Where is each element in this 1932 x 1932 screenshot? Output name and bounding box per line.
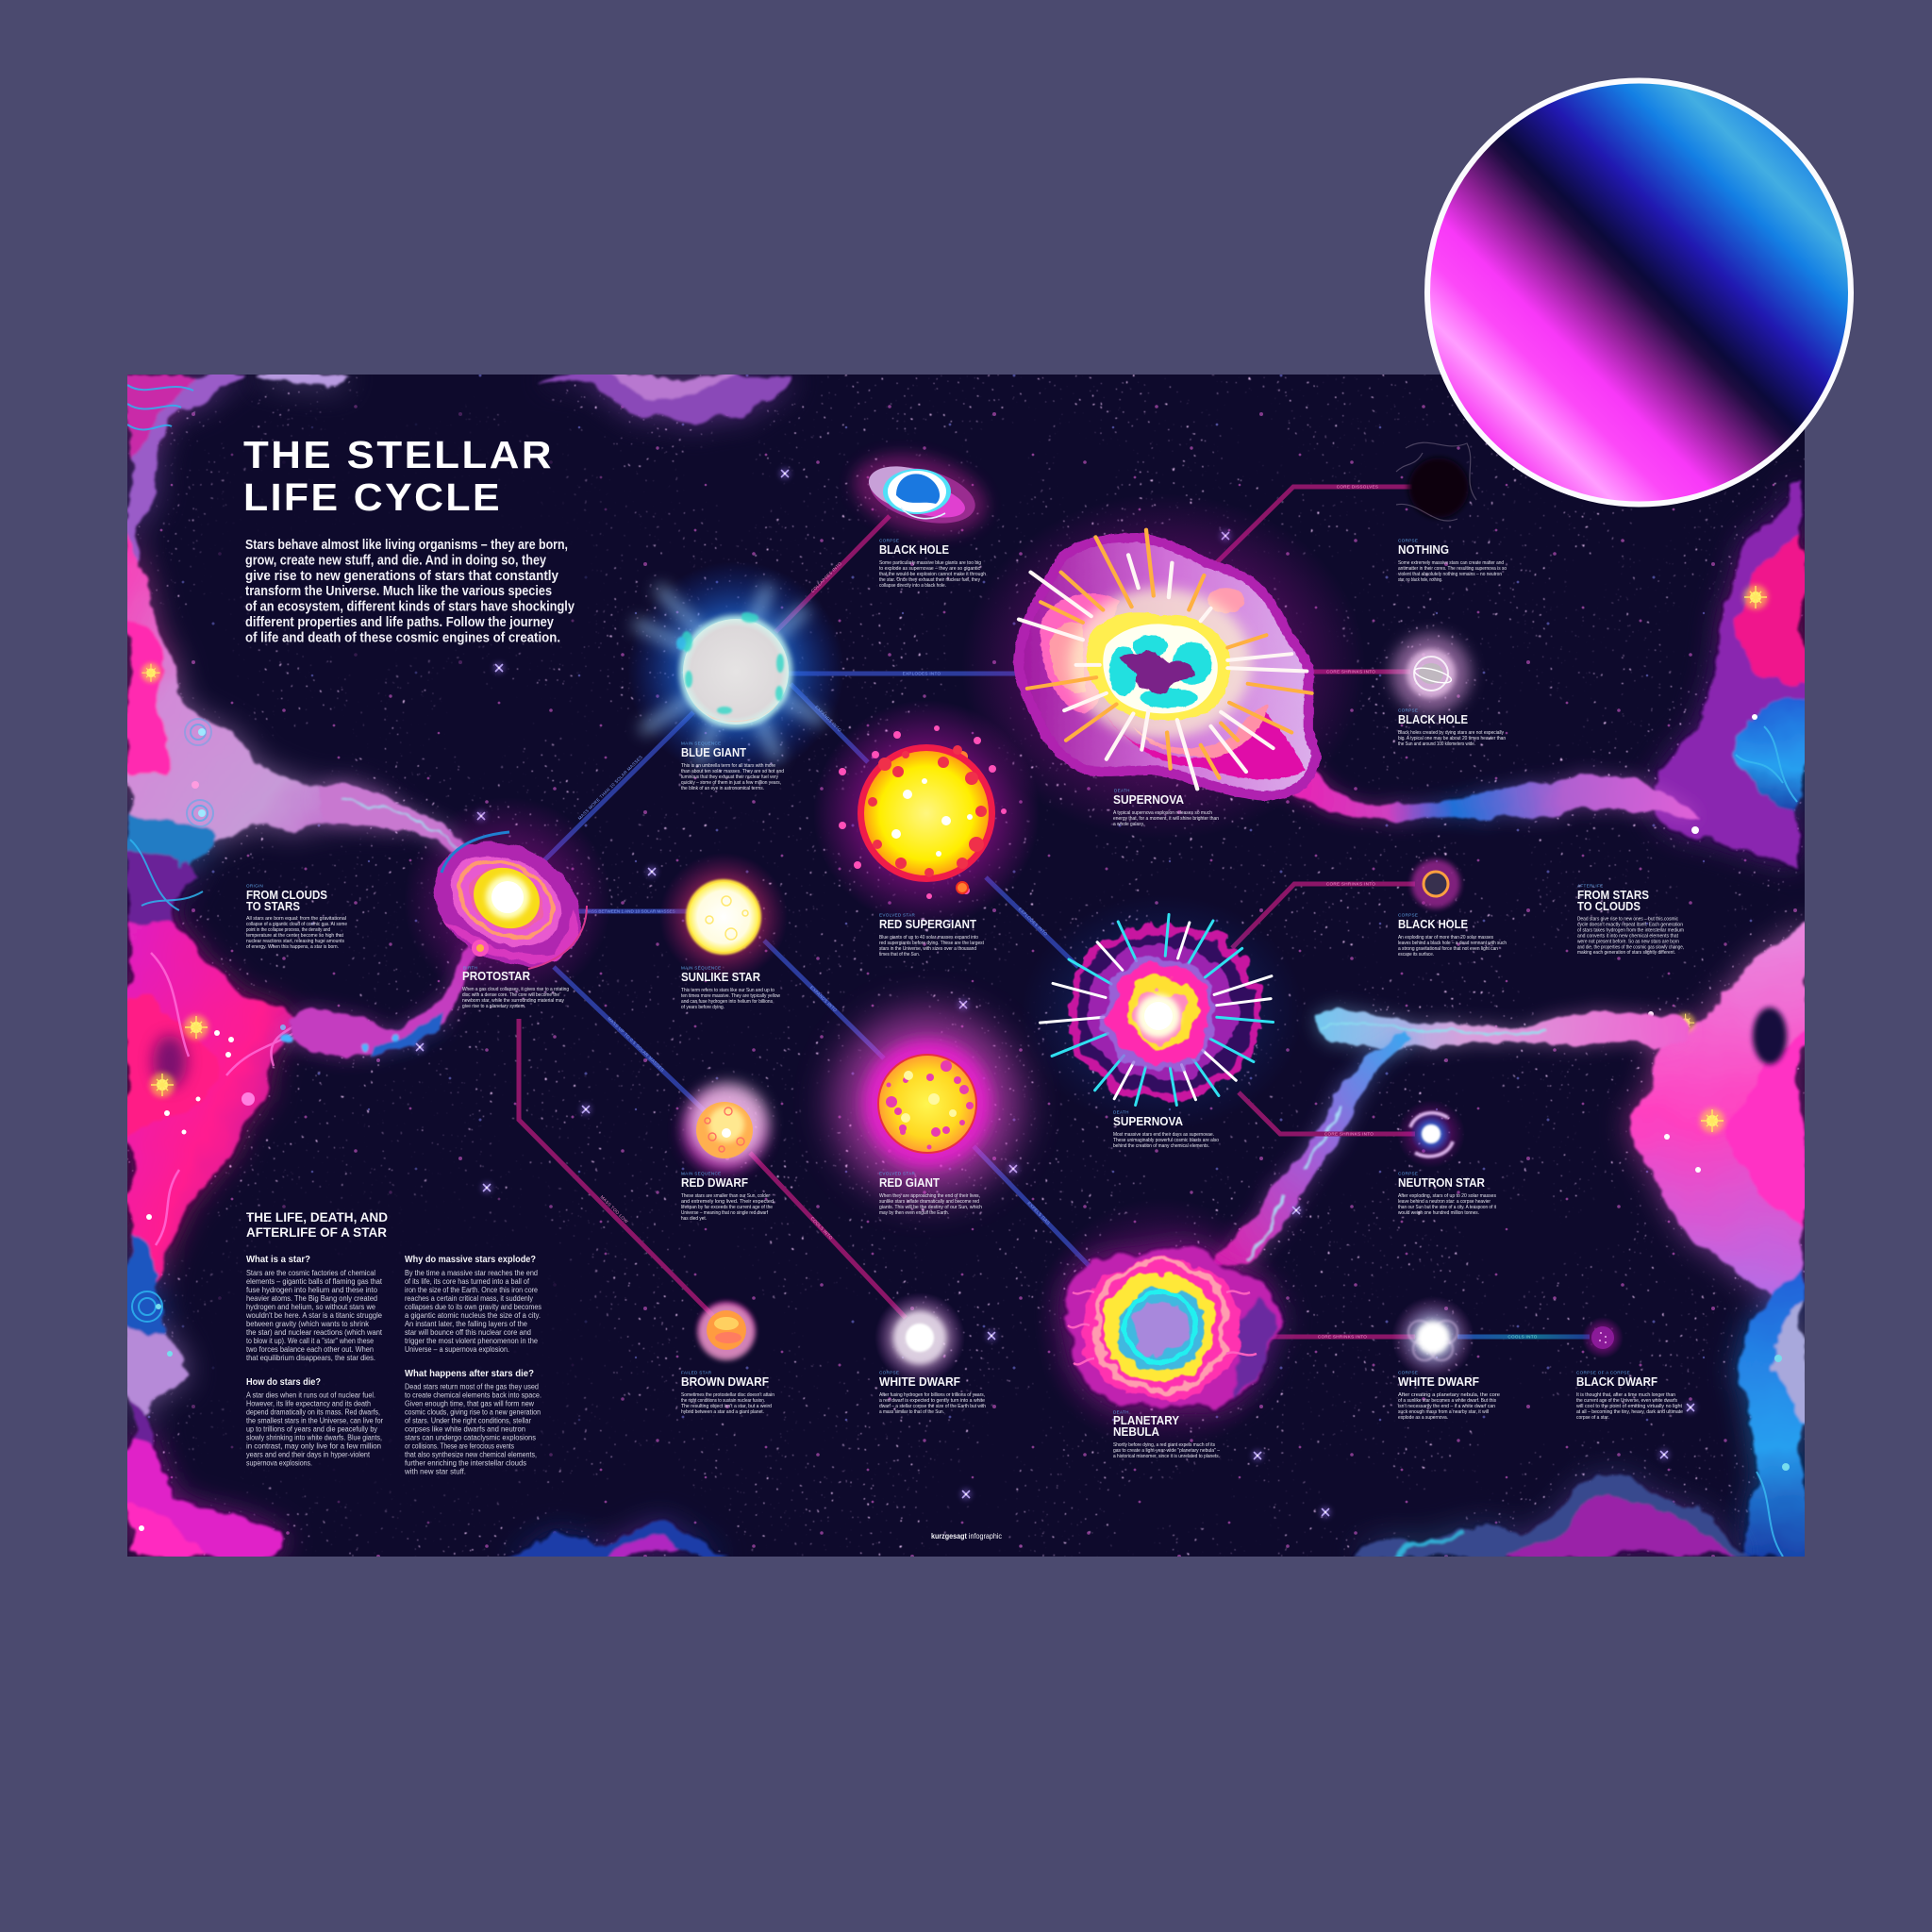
text: nothing xyxy=(1398,538,1507,583)
object: white dwarf left xyxy=(874,1292,965,1383)
text: planetary nebula: Shortly before dying, a red giant expels much of its xyxy=(1113,1442,1215,1448)
text: from clouds to stars xyxy=(246,883,347,950)
text: black dwarf: CORPSE OF A CORPSE xyxy=(1576,1370,1630,1375)
text: white dwarf right: isn't necessarily the end – if a white dwarf can xyxy=(1398,1404,1495,1409)
text: red giant: EVOLVED STAR xyxy=(879,1172,916,1175)
text: from clouds to stars: of energy. When this happens, a star is born. xyxy=(246,944,339,950)
text: black hole lower xyxy=(1398,913,1507,958)
text: black hole lower: BLACK HOLE xyxy=(1398,917,1468,931)
connector: supernova to black hole: CORE SHRINKS INTO xyxy=(1326,670,1375,675)
text: brown dwarf: the right conditions to sustain nuclear fusion. xyxy=(681,1398,765,1404)
text block: what happens after stars die: or collisions. These are ferocious events xyxy=(405,1441,514,1451)
text block: what is a star: between gravity (which wants to shrink xyxy=(246,1320,370,1328)
text: planetary nebula: NEBULA xyxy=(1113,1424,1160,1439)
object: protostar xyxy=(404,797,611,1005)
text block: what is a star: two forces balance each other out. When xyxy=(246,1345,374,1354)
object: red supergiant star xyxy=(813,700,1040,926)
nebula: planetary nebula tail stream xyxy=(1212,1030,1411,1267)
text: red supergiant xyxy=(879,913,984,958)
text block: what happens after stars die: that also synthesize new chemical elements, xyxy=(405,1451,537,1458)
text block: what happens after stars die: of stars. Under the right conditions, stellar xyxy=(405,1417,531,1424)
gradient colour disc callout xyxy=(1427,81,1851,504)
text: neutron star: After exploding, stars of up to 20 solar masses xyxy=(1398,1193,1496,1199)
nebula: supernova tail streams xyxy=(1255,753,1698,821)
text: white dwarf left: CORPSE xyxy=(879,1370,899,1375)
text: supernova upper: a whole galaxy. xyxy=(1113,822,1144,827)
object: brown dwarf xyxy=(698,1302,755,1360)
text block: what happens after stars die: corpses like white dwarfs and neutron xyxy=(405,1424,525,1434)
text: black hole top: BLACK HOLE xyxy=(879,542,949,557)
heading: life, death and afterlife xyxy=(246,1210,388,1240)
text: supernova lower xyxy=(1113,1109,1219,1149)
text: nothing: CORPSE xyxy=(1398,538,1418,543)
text: white dwarf left: a mass similar to that of the Sun. xyxy=(879,1409,944,1415)
text: protostar: PROTOSTAR xyxy=(462,969,531,983)
text: neutron star: would weigh one hundred million tonnes. xyxy=(1397,1210,1479,1216)
text block: what happens after stars die: with new star stuff. xyxy=(404,1468,466,1475)
text: protostar: newborn star, while the surrounding material may xyxy=(462,998,564,1004)
text: white dwarf right: of a sunlike star becomes a white dwarf. But this xyxy=(1398,1398,1496,1404)
text block: why do massive stars explode: trigger the most violent phenomenon in the xyxy=(405,1337,539,1345)
text block: what is a star: elements – gigantic balls of flaming gas that xyxy=(246,1277,383,1286)
text block: what is a star: heavier atoms. The Big Bang only created xyxy=(246,1294,377,1303)
text: supernova lower: behind the creation of many chemical elements. xyxy=(1113,1143,1209,1149)
text: from clouds to stars: TO STARS xyxy=(246,899,300,913)
object: black hole lower xyxy=(1411,859,1460,908)
text: sunlike star: ten times more massive. They are typically yellow xyxy=(681,993,781,999)
text: black hole top xyxy=(879,538,986,589)
connector: protostar to brown dwarf xyxy=(519,1019,722,1324)
connector: supernova to neutron star xyxy=(1239,1092,1415,1137)
object: blue giant star xyxy=(627,561,844,778)
text: red supergiant: Blue giants of up to 40 solar masses expand into xyxy=(879,935,978,941)
text: black hole top: that the would-be explosion cannot make it through xyxy=(879,572,986,577)
object: supernova upper xyxy=(961,493,1366,840)
text: protostar xyxy=(462,966,569,1009)
text: from clouds to stars: nuclear reactions start, releasing huge amounts xyxy=(246,939,344,944)
text: supernova upper: SUPERNOVA xyxy=(1113,792,1185,807)
text: blue giant: than about ten solar masses. They are so hot and xyxy=(681,769,784,774)
connector: sunlike star to red giant: EXPANDS INTO xyxy=(809,985,838,1013)
text: white dwarf right: explode as a supernova. xyxy=(1398,1415,1448,1421)
connector: protostar to blue giant: MASS MORE THAN 10 SOLAR MASSES xyxy=(577,755,643,821)
text: neutron star: CORPSE xyxy=(1398,1172,1418,1175)
connector: sunlike star to red giant xyxy=(764,941,884,1058)
text block: what is a star: Stars are the cosmic factories of chemical xyxy=(246,1269,375,1277)
text block: how do stars die: depend dramatically on its mass. Red dwarfs, xyxy=(246,1407,380,1417)
text: black hole lower: escape its surface. xyxy=(1398,952,1434,958)
text: black hole middle: BLACK HOLE xyxy=(1398,712,1468,726)
text block: what happens after stars die: cosmic clouds, giving rise to a new generation xyxy=(405,1407,541,1417)
nebula: top clouds xyxy=(259,375,788,426)
text: from clouds to stars: ORIGIN xyxy=(246,883,263,889)
text: black hole lower: CORPSE xyxy=(1398,913,1418,917)
text: black hole top: CORPSE xyxy=(879,538,899,543)
text block: what is a star: that equilibrium disappears, the star dies. xyxy=(246,1354,375,1362)
text: protostar: When a gas cloud collapses, it gives rise to a rotating xyxy=(462,987,569,992)
text: red dwarf: These stars are smaller than our Sun, colder xyxy=(681,1193,770,1199)
text: red supergiant: red supergiants before dying. These are the largest xyxy=(879,941,984,946)
text block: how do stars die: How do stars die? xyxy=(246,1377,321,1388)
connector: blue giant to black hole xyxy=(775,516,890,632)
connector: supernova to black hole lower: CORE SHRINKS INTO xyxy=(1326,882,1375,887)
intro text xyxy=(245,538,575,645)
text: supernova lower: Most massive stars end their days as supernovae. xyxy=(1113,1132,1214,1138)
text block: what happens after stars die: further enriching the interstellar clouds xyxy=(405,1458,526,1468)
intro text: Stars behave almost like living organisms – they are born, xyxy=(245,538,568,553)
text: white dwarf right xyxy=(1398,1370,1500,1421)
text: from clouds to stars: All stars are born equal: from the gravitational xyxy=(246,916,346,922)
title: THE STELLAR xyxy=(243,433,554,476)
text: red dwarf xyxy=(681,1172,774,1222)
sparkle stars xyxy=(414,468,1696,1518)
text block: what happens after stars die xyxy=(404,1369,541,1475)
intro text: give rise to new generations of stars that constantly xyxy=(245,569,558,584)
connector: blue giant to supernova: EXPLODES INTO xyxy=(903,672,941,676)
text: blue giant: quickly – some of them in just a few million years, xyxy=(681,780,781,786)
text block: what is a star: wouldn't be here. A star is a titanic struggle xyxy=(245,1311,383,1320)
text block: how do stars die: A star dies when it runs out of nuclear fuel. xyxy=(246,1391,375,1400)
text: brown dwarf: BROWN DWARF xyxy=(681,1374,769,1389)
object: supernova lower xyxy=(1021,894,1304,1130)
text: red giant: may by then even engulf the Earth. xyxy=(879,1210,949,1216)
nebula: bottom clouds xyxy=(505,1474,1745,1557)
text: black hole middle: the Sun and around 100 kilometers wide. xyxy=(1398,741,1475,747)
text: from stars to clouds: were not present before. So as new stars are born xyxy=(1576,940,1679,945)
text: black dwarf: corpse of a star. xyxy=(1576,1415,1609,1421)
text: supernova lower: DEATH xyxy=(1113,1109,1129,1115)
text: sunlike star: of years before dying. xyxy=(681,1005,724,1010)
text: blue giant: This is an umbrella term for all stars with more xyxy=(681,763,775,769)
text: black hole top: the star. Once they exhaust their nuclear fuel, they xyxy=(879,577,980,583)
intro text: grow, create new stuff, and die. And in doing so, they xyxy=(245,553,546,568)
text block: what is a star: fuse hydrogen into helium and these into xyxy=(246,1286,378,1294)
text: planetary nebula xyxy=(1113,1409,1221,1459)
text block: what happens after stars die: to create chemical elements back into space. xyxy=(405,1391,541,1400)
connector: blue giant to red supergiant xyxy=(791,684,868,762)
text: black hole lower: leaves behind a black hole – a dead remnant with such xyxy=(1398,941,1507,946)
connector: red supergiant to supernova xyxy=(986,877,1078,967)
nebula: white dwarf to right cloud stream xyxy=(1315,1012,1691,1049)
text: red giant xyxy=(879,1172,982,1216)
text: from stars to clouds: Dead stars give rise to new ones – but this cosmic xyxy=(1577,917,1678,923)
connector: blue giant to red supergiant: EXPANDS INTO xyxy=(814,705,842,733)
text block: what is a star: What is a star? xyxy=(246,1255,310,1265)
text block: why do massive stars explode: collapses due to its own gravity and becomes xyxy=(405,1303,541,1311)
text: blue giant: MAIN SEQUENCE xyxy=(681,741,721,745)
object: black dwarf xyxy=(1582,1317,1624,1358)
text block: why do massive stars explode: of its life, its core has turned into a ball of xyxy=(405,1277,530,1286)
text: black dwarf: will cool to the point of emitting virtually no light xyxy=(1575,1404,1682,1409)
text: neutron star: than our Sun but the size of a city. A teaspoon of it xyxy=(1398,1205,1496,1210)
text block: what happens after stars die: stars can undergo cataclysmic explosions xyxy=(405,1434,536,1441)
object: sunlike star xyxy=(659,853,788,981)
text: brown dwarf: FAILED STAR xyxy=(681,1370,712,1375)
text: from clouds to stars: collapse of a gigantic cloud of cosmic gas. At some xyxy=(246,922,347,927)
text block: what is a star xyxy=(245,1255,383,1362)
intro text: different properties and life paths. Follow the journey xyxy=(245,615,554,630)
text: planetary nebula: DEATH xyxy=(1113,1409,1129,1415)
text block: how do stars die: supernova explosions. xyxy=(246,1458,312,1468)
text: red dwarf: and extremely long lived. Their expected xyxy=(681,1199,774,1205)
text: nothing: NOTHING xyxy=(1398,542,1449,557)
text block: what happens after stars die: What happens after stars die? xyxy=(405,1369,534,1379)
text: white dwarf left: a red dwarf is expected to gently turn into a white xyxy=(879,1398,985,1404)
connector: protostar to red dwarf: MASS UP TO 0.5 SOLAR MASSES xyxy=(607,1016,665,1073)
text: black hole lower: a strong gravitational force that not even light can xyxy=(1398,946,1498,952)
text: white dwarf left: WHITE DWARF xyxy=(879,1374,960,1389)
text: blue giant: BLUE GIANT xyxy=(681,745,746,759)
text block: what is a star: the star) and nuclear reactions (which want xyxy=(246,1328,383,1337)
text block: what happens after stars die: Given enough time, that gas will form new xyxy=(405,1400,534,1407)
connector: protostar to sunlike star: MASS BETWEEN 1 AND 10 SOLAR MASSES xyxy=(585,909,675,914)
text: red supergiant: times that of the Sun. xyxy=(879,952,920,958)
text: nothing: violent that absolutely nothing remains – no neutron xyxy=(1398,572,1502,577)
text: from stars to clouds: and die, the properties of the cosmic gas slowly change, xyxy=(1577,945,1684,951)
text block: why do massive stars explode: reaches a certain critical mass, it suddenly xyxy=(405,1294,533,1303)
text: red giant: When they are approaching the end of their lives, xyxy=(879,1193,980,1199)
text: nothing: Some extremely massive stars can create matter and xyxy=(1398,560,1504,566)
text: from stars to clouds: AFTERLIFE xyxy=(1577,883,1603,889)
connector: blue giant to black hole: COLLAPSES INTO xyxy=(810,561,842,593)
text block: how do stars die: up to trillions of years and die peacefully by xyxy=(246,1424,377,1434)
nebula: right border clouds xyxy=(1637,481,1805,1557)
text: from clouds to stars: temperature at the center become so high that xyxy=(246,933,343,939)
text: from stars to clouds: TO CLOUDS xyxy=(1577,899,1641,913)
text: supernova upper xyxy=(1113,789,1219,827)
heading: life, death and afterlife: AFTERLIFE OF A STAR xyxy=(246,1225,387,1240)
text: black dwarf xyxy=(1575,1370,1683,1421)
text: from stars to clouds: FROM STARS xyxy=(1577,888,1649,902)
connector: supernova to neutron star: CORE SHRINKS INTO xyxy=(1324,1132,1374,1137)
text: red supergiant: EVOLVED STAR xyxy=(879,913,916,917)
text: black hole middle: big. A typical one may be about 20 times heavier than xyxy=(1398,736,1506,741)
text: red dwarf: Universe – meaning that no single red dwarf xyxy=(681,1210,768,1216)
object: black hole middle xyxy=(1391,634,1471,713)
text block: how do stars die xyxy=(246,1377,383,1468)
text block: why do massive stars explode: iron the size of the Earth. Once this iron core xyxy=(405,1286,538,1294)
text: brown dwarf: hybrid between a star and a giant planet. xyxy=(681,1409,764,1415)
text: neutron star: NEUTRON STAR xyxy=(1398,1175,1486,1190)
text: black hole top: to explode as supernovae – they are so gigantic xyxy=(879,566,980,572)
text: brown dwarf: The resulting object isn't a star, but a weird xyxy=(681,1404,772,1409)
nebula: stream from left cloud to protostar (lower) xyxy=(283,943,476,1056)
connector: supernova to black hole xyxy=(1307,670,1410,675)
text: supernova upper: A typical supernova explosion releases so much xyxy=(1113,810,1212,816)
object: red dwarf star xyxy=(683,1083,768,1172)
text block: what is a star: to blow it up). We call it a "star" when these xyxy=(246,1337,374,1345)
connector: supernova to nothing: CORE DISSOLVES xyxy=(1337,485,1378,490)
text block: how do stars die: the smallest stars in the Universe, can live for xyxy=(246,1417,383,1424)
text: from clouds to stars: FROM CLOUDS xyxy=(246,888,327,902)
connector: supernova to nothing xyxy=(1213,485,1412,566)
nebula: left border clouds xyxy=(127,375,396,1557)
connector: protostar to blue giant xyxy=(542,712,693,862)
text: from stars to clouds: and converts it into new chemical elements that xyxy=(1577,934,1678,940)
object: black hole top xyxy=(844,441,995,547)
text: brown dwarf: Sometimes the protostellar disc doesn't attain xyxy=(681,1392,774,1398)
connector: supernova to black hole lower xyxy=(1232,882,1415,948)
text: red dwarf: has died yet. xyxy=(681,1216,707,1222)
nebula: stream from left cloud to protostar (upper) xyxy=(321,785,472,855)
text block: why do massive stars explode: Why do massive stars explode? xyxy=(405,1255,536,1265)
connector: protostar to brown dwarf: MASS TOO LOW xyxy=(599,1194,629,1224)
connector: red dwarf to white dwarf: COOLS INTO xyxy=(809,1216,834,1241)
heading: life, death and afterlife: THE LIFE, DEATH, AND xyxy=(246,1210,388,1224)
connector: protostar to red dwarf xyxy=(554,967,717,1123)
text: black hole lower: An exploding star of more than 20 solar masses xyxy=(1398,935,1493,941)
text: neutron star xyxy=(1397,1172,1496,1216)
text: supernova lower: SUPERNOVA xyxy=(1113,1114,1184,1128)
text: sunlike star: MAIN SEQUENCE xyxy=(681,966,721,970)
poster: the stellar life cycle xyxy=(127,375,1805,1557)
text block: what is a star: hydrogen and helium, so without stars we xyxy=(246,1303,376,1311)
text block: what happens after stars die: Dead stars return most of the gas they used xyxy=(405,1383,539,1391)
text: white dwarf right: After creating a planetary nebula, the core xyxy=(1398,1392,1500,1398)
text: black hole middle xyxy=(1398,708,1506,747)
text: blue giant xyxy=(681,741,784,791)
text: red dwarf: lifespan by far exceeds the current age of the xyxy=(681,1205,773,1210)
title: LIFE CYCLE xyxy=(243,475,502,519)
text: supernova lower: These unimaginably powerful cosmic blasts are also xyxy=(1113,1138,1219,1143)
title xyxy=(243,433,554,519)
connector: red giant to planetary nebula xyxy=(974,1146,1106,1283)
text: white dwarf right: WHITE DWARF xyxy=(1398,1374,1479,1389)
text: planetary nebula: PLANETARY xyxy=(1113,1413,1179,1427)
text: red dwarf: MAIN SEQUENCE xyxy=(681,1172,721,1175)
connector: red giant to planetary nebula: EXPELS GAS xyxy=(1026,1201,1051,1225)
text block: why do massive stars explode: By the time a massive star reaches the end xyxy=(405,1269,538,1277)
text: from stars to clouds: cycle doesn't exactly repeat itself. Each generation xyxy=(1577,923,1683,928)
text: red giant: giants. This will be the destiny of our Sun, which xyxy=(879,1205,982,1210)
text: black hole middle: CORPSE xyxy=(1398,708,1418,713)
text: sunlike star: This term refers to stars like our Sun and up to xyxy=(681,988,774,993)
text: red supergiant: stars in the Universe, with sizes over a thousand xyxy=(879,946,976,952)
text: planetary nebula: a historical misnomer, since it is unrelated to planets. xyxy=(1113,1454,1220,1459)
text: black dwarf: the current age of the Universe, even white dwarfs xyxy=(1576,1398,1677,1404)
text: white dwarf left xyxy=(879,1370,986,1415)
text: from stars to clouds: making each generation of stars slightly different. xyxy=(1577,950,1675,956)
text: sunlike star: SUNLIKE STAR xyxy=(681,970,761,984)
intro text: of an ecosystem, different kinds of stars have shockingly xyxy=(245,600,575,615)
connector: planetary nebula to white dwarf: CORE SHRINKS INTO xyxy=(1318,1335,1367,1340)
text: white dwarf left: After fusing hydrogen for billions or trillions of years, xyxy=(879,1392,985,1398)
text: nothing: star, no black hole, nothing. xyxy=(1398,577,1442,583)
object: nothing (dark remnant) xyxy=(1396,442,1476,521)
text: supernova upper: DEATH xyxy=(1114,789,1130,792)
text: black hole middle: Black holes created by dying stars are not especially xyxy=(1398,730,1504,736)
text: blue giant: the blink of an eye in astronomical terms. xyxy=(681,786,764,791)
connector: red supergiant to supernova: EXPLODES INTO xyxy=(1018,907,1049,937)
text: black dwarf: It is thought that, after a time much longer than xyxy=(1576,1392,1675,1398)
connector: white dwarf to black dwarf: COOLS INTO xyxy=(1507,1335,1538,1340)
object: neutron star xyxy=(1397,1100,1465,1168)
text: from stars to clouds: of stars takes hydrogen from the interstellar medium xyxy=(1577,928,1684,934)
text: sunlike star xyxy=(681,966,781,1010)
text: red giant: RED GIANT xyxy=(879,1175,940,1190)
text: black dwarf: at all – becoming the tiny, heavy, dark and ultimate xyxy=(1576,1409,1683,1415)
text: brown dwarf xyxy=(681,1370,774,1415)
text: blue giant: luminous that they exhaust their nuclear fuel very xyxy=(681,774,778,780)
text: black hole top: collapse directly into a black hole. xyxy=(879,583,946,589)
text: protostar: give rise to a planetary system. xyxy=(462,1004,525,1009)
text block: how do stars die: However, its life expectancy and its death xyxy=(246,1400,371,1407)
intro text: transform the Universe. Much like the various species xyxy=(245,584,552,599)
object: white dwarf right xyxy=(1391,1296,1474,1379)
text block: why do massive stars explode xyxy=(405,1255,541,1354)
text: red supergiant: RED SUPERGIANT xyxy=(879,917,976,931)
object: planetary nebula xyxy=(1035,1198,1290,1453)
intro text: of life and death of these cosmic engines of creation. xyxy=(245,630,560,645)
text block: how do stars die: years and end their days in hyper-violent xyxy=(246,1451,371,1458)
text block: why do massive stars explode: An instant later, the falling layers of the xyxy=(405,1320,528,1328)
text: sunlike star: and can fuse hydrogen into helium for billions xyxy=(681,999,773,1005)
credit: kurzgesagt infographic: kurzgesagt infographic xyxy=(931,1532,1002,1541)
text: neutron star: leave behind a neutron star: a corpse heavier xyxy=(1398,1199,1491,1205)
connector: red dwarf to white dwarf xyxy=(750,1153,906,1318)
object: red giant star xyxy=(833,1009,1022,1198)
text: white dwarf left: dwarf – a stellar corpse the size of the Earth but with xyxy=(879,1404,986,1409)
text: protostar: disc with a dense core. The core will become the xyxy=(462,992,559,998)
text: black dwarf: BLACK DWARF xyxy=(1576,1374,1657,1389)
text: red dwarf: RED DWARF xyxy=(681,1175,748,1190)
connector: white dwarf to black dwarf xyxy=(1457,1334,1590,1340)
text: white dwarf right: CORPSE xyxy=(1398,1370,1418,1375)
text: nothing: antimatter in their cores. The resulting supernova is so xyxy=(1398,566,1507,572)
text: protostar: BIRTH xyxy=(463,966,477,970)
text: from stars to clouds xyxy=(1576,883,1684,956)
text: white dwarf right: suck enough mass from a nearby star, it will xyxy=(1398,1409,1489,1415)
text block: how do stars die: slowly shrinking into white dwarfs. Blue giants, xyxy=(246,1434,382,1441)
text block: why do massive stars explode: Universe – a supernova explosion. xyxy=(405,1345,509,1354)
text block: why do massive stars explode: star will bounce off this nuclear core and xyxy=(405,1328,531,1337)
text block: why do massive stars explode: a gigantic atomic nucleus the size of a city. xyxy=(405,1311,541,1320)
text: supernova upper: energy that, for a moment, it will shine brighter than xyxy=(1113,816,1219,822)
text: black hole top: Some particularly massive blue giants are too big xyxy=(879,560,981,566)
text: planetary nebula: gas to create a light-year-wide "planetary nebula" – xyxy=(1113,1448,1221,1454)
text: from clouds to stars: point in the collapse process, the density and xyxy=(246,927,330,933)
text: red giant: sunlike stars inflate dramatically and become red xyxy=(879,1199,979,1205)
text block: how do stars die: in contrast, may only live for a few million xyxy=(246,1441,381,1451)
